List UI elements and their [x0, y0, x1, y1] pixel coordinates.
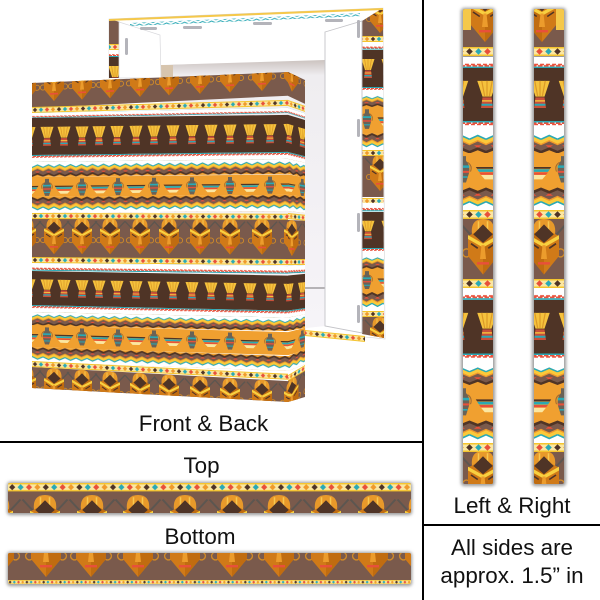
note: side depth: [440, 535, 584, 588]
masks: [8, 553, 411, 577]
wooden frame patch: [160, 65, 173, 79]
wrapped left edge: [109, 20, 120, 78]
diamond border: [8, 580, 411, 584]
wrapped top edge zigzag: [130, 13, 360, 26]
masks: [8, 495, 411, 513]
frame crossbar: [305, 287, 325, 289]
heading: left and right: Left & Right: [454, 493, 571, 518]
note: side depth: approx. 1.5” in: [440, 563, 584, 588]
heading: bottom: Bottom: [165, 524, 235, 549]
top flap: [119, 12, 362, 65]
heading: front and back: Front & Back: [139, 411, 269, 436]
wrapped right edge: [362, 10, 384, 338]
diamond border: [8, 483, 411, 492]
panel: canvas back with folded flaps: [108, 8, 386, 342]
wrapped top edge line: [109, 8, 383, 21]
panel: canvas side face: [288, 72, 305, 402]
right flap: [325, 21, 362, 333]
heading: top: Top: [183, 453, 220, 478]
panel: left edge strip: [459, 6, 568, 488]
panel: right edge strip: [166, 0, 600, 514]
left flap: [119, 22, 161, 78]
note: side depth: All sides are: [451, 535, 573, 560]
inner recess of the canvas frame: [160, 59, 325, 330]
panel: top edge strip: [5, 480, 414, 517]
wrapped bottom edge strip: [305, 330, 365, 342]
panel: bottom edge strip: [5, 550, 414, 588]
panel: canvas front face: [32, 72, 288, 402]
staples: [125, 19, 360, 323]
